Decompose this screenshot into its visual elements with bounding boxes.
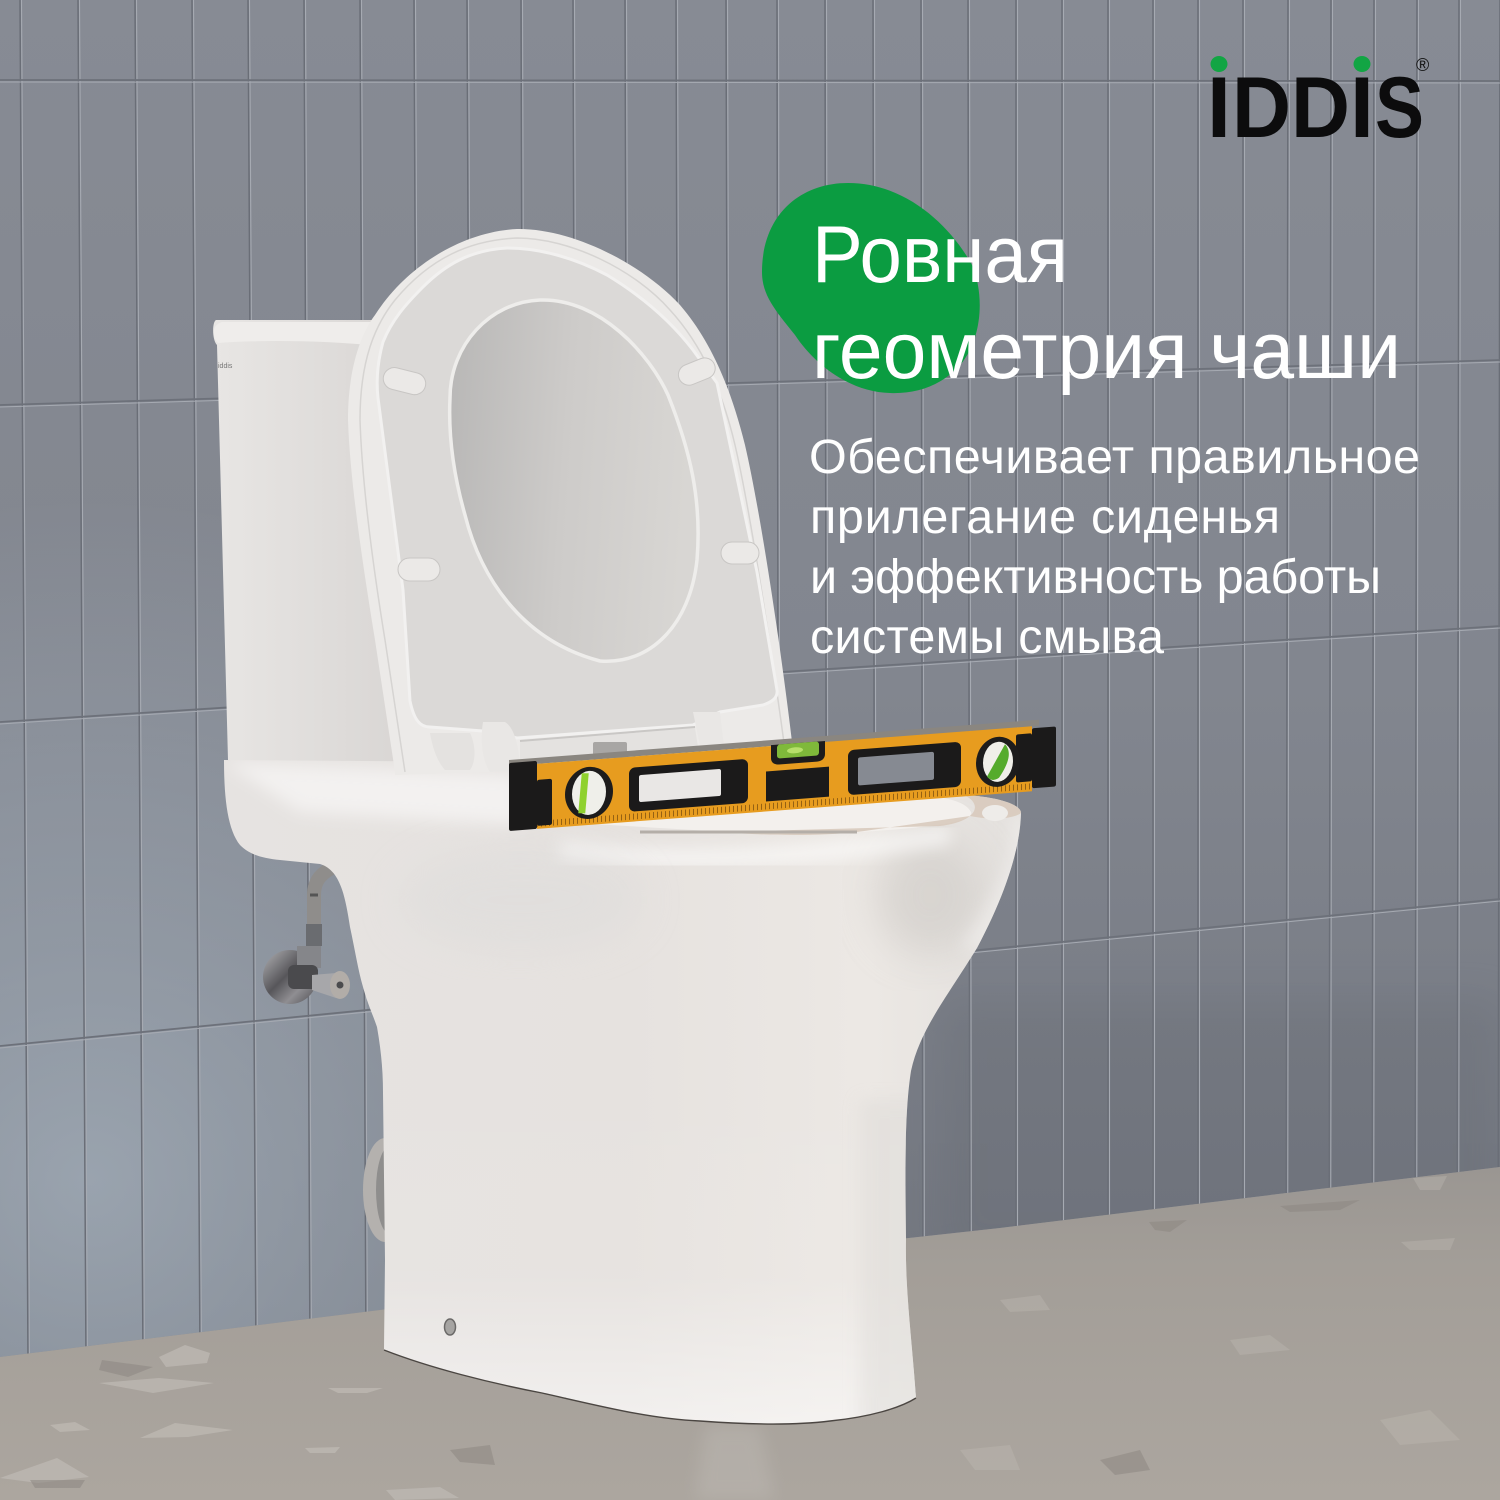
description text: и эффективность работы (810, 550, 1381, 604)
IDDIS logo: D (1232, 60, 1291, 156)
toilet bowl body (220, 750, 1030, 1430)
right handle window (848, 742, 961, 795)
description text (809, 430, 1420, 664)
top bubble vial (771, 741, 825, 765)
bowl opening and rim (560, 795, 1021, 835)
IDDIS logo: ® (1416, 55, 1429, 75)
terrazzo floor (0, 1167, 1500, 1500)
spirit level (509, 718, 1056, 831)
heading: геометрия чаши (812, 306, 1401, 396)
seat inner panel (377, 248, 777, 738)
heading: Ровная (812, 210, 1068, 300)
seat lower hinge area (482, 712, 720, 758)
IDDIS logo: D (1291, 60, 1350, 156)
IDDIS logo (1207, 55, 1429, 156)
right round vial (976, 735, 1020, 789)
description text: Обеспечивает правильное (809, 430, 1420, 484)
IDDIS logo: I (1350, 60, 1374, 156)
tank brand mark: iddis (218, 363, 233, 370)
seat central opening (450, 300, 698, 661)
drain hose behind toilet (363, 1138, 407, 1242)
description text: прилегание сиденья (810, 490, 1280, 544)
raised toilet seat and lid (348, 229, 793, 775)
drain screw cap (444, 1319, 456, 1335)
centre label plate (766, 767, 829, 801)
left handle window (629, 759, 748, 812)
level end caps (509, 721, 1056, 831)
shut-off valve and pipe (263, 866, 350, 1004)
heading (812, 210, 1401, 396)
IDDIS logo: I (1207, 60, 1231, 156)
description text: системы смыва (810, 610, 1164, 664)
cistern tank (213, 320, 400, 790)
left round vial (565, 765, 613, 821)
green accent blob (762, 183, 980, 393)
seat bumpers (381, 355, 759, 581)
IDDIS logo: S (1375, 60, 1424, 156)
